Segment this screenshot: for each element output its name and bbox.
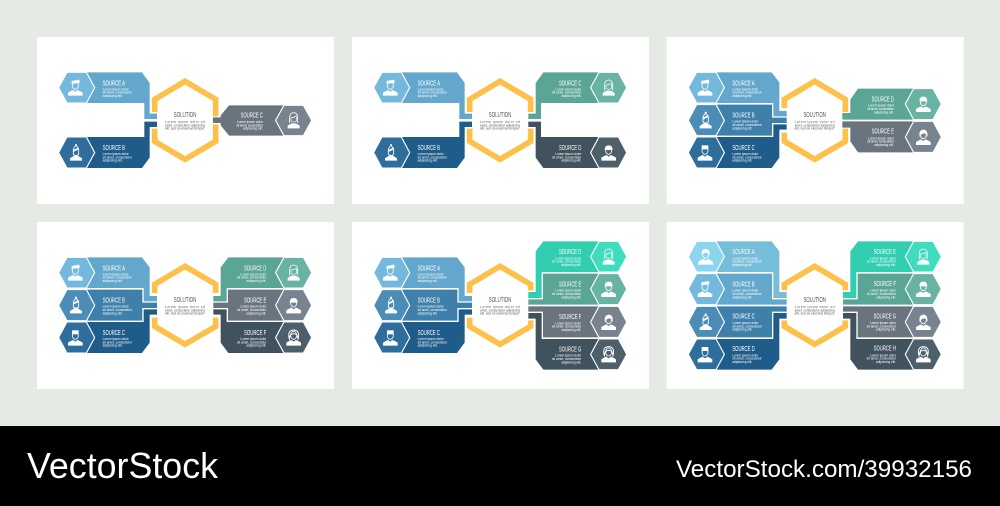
- source C: Lorem ipsum dolor: [237, 120, 263, 124]
- source D: [528, 241, 627, 298]
- source G: Lorem ipsum dolor: [555, 354, 581, 358]
- source F: [843, 274, 941, 305]
- panel 6: eight sources: [667, 222, 964, 389]
- source F: sit amet, consectetur: [237, 340, 266, 344]
- source F: adipiscing elit.: [876, 295, 896, 299]
- source B: sit amet, consectetur: [732, 123, 762, 127]
- source B: [59, 122, 157, 168]
- solution hexagon outline: [155, 81, 216, 159]
- source D: sit amet, consectetur: [237, 276, 266, 280]
- source B: Lorem ipsum dolor: [418, 152, 444, 156]
- panel 5: seven sources: [352, 222, 649, 389]
- source E: adipiscing elit.: [876, 263, 896, 267]
- source A: sit amet, consectetur: [418, 276, 447, 280]
- source D: [213, 257, 312, 301]
- source D: [842, 89, 941, 120]
- source F: [528, 306, 627, 337]
- solution text: elit, sed do eiusmod tempor.: [165, 311, 205, 315]
- solution text: [480, 112, 520, 130]
- source G: Lorem ipsum dolor: [870, 321, 896, 325]
- source D: adipiscing elit.: [561, 263, 581, 267]
- source F: [213, 309, 312, 353]
- source A: SOURCE A: [732, 249, 755, 256]
- solution text: Lorem ipsum dolor sit: [165, 120, 205, 124]
- source A: sit amet, consectetur: [103, 276, 132, 280]
- source C: [688, 124, 787, 168]
- source A: sit amet, consectetur: [103, 91, 132, 95]
- source F: Lorem ipsum dolor: [555, 321, 581, 325]
- source C: sit amet, consectetur: [732, 155, 762, 159]
- solution text: Lorem ipsum dolor sit: [480, 305, 520, 309]
- source A: SOURCE A: [103, 265, 125, 272]
- solution text: [165, 297, 205, 315]
- source B: SOURCE B: [418, 145, 440, 152]
- source B: [59, 290, 157, 321]
- source B: Lorem ipsum dolor: [732, 120, 758, 124]
- source C: adipiscing elit.: [561, 94, 581, 98]
- source C: Lorem ipsum dolor: [555, 87, 581, 91]
- source F: sit amet, consectetur: [552, 325, 581, 329]
- source D: SOURCE D: [244, 265, 266, 272]
- solution hexagon outline: [784, 266, 845, 344]
- panel 2: four sources: [352, 37, 649, 204]
- source E: sit amet, consectetur: [552, 292, 581, 296]
- source G: adipiscing elit.: [561, 360, 581, 364]
- source A: SOURCE A: [418, 265, 440, 272]
- source A: adipiscing elit.: [103, 279, 123, 283]
- brand name: VectorStock: [27, 445, 219, 486]
- solution text: [795, 297, 835, 315]
- source C: [688, 306, 787, 337]
- source C: sit amet, consectetur: [732, 324, 762, 328]
- source B: sit amet, consectetur: [418, 155, 447, 159]
- source C: SOURCE C: [103, 330, 125, 337]
- source C: SOURCE C: [241, 113, 263, 120]
- source D: Lorem ipsum dolor: [732, 353, 758, 357]
- source E: [842, 121, 941, 152]
- source A: [374, 72, 472, 119]
- source D: SOURCE D: [559, 145, 581, 152]
- source B: [374, 290, 472, 321]
- solution text: SOLUTION: [489, 112, 511, 119]
- source B: SOURCE B: [732, 281, 755, 288]
- source C: sit amet, consectetur: [418, 340, 447, 344]
- source C: sit amet, consectetur: [552, 91, 581, 95]
- source A: [688, 241, 787, 298]
- source D: Lorem ipsum dolor: [868, 104, 894, 108]
- source H: adipiscing elit.: [876, 360, 896, 364]
- source C: SOURCE C: [418, 330, 440, 337]
- source B: [374, 122, 472, 168]
- source F: Lorem ipsum dolor: [870, 289, 896, 293]
- source A: [59, 72, 157, 119]
- source A: SOURCE A: [732, 80, 755, 87]
- source A: Lorem ipsum dolor: [732, 87, 758, 91]
- solution text: Lorem ipsum dolor sit: [480, 120, 520, 124]
- source D: [528, 122, 627, 168]
- solution hexagon outline: [470, 266, 531, 344]
- source D: adipiscing elit.: [561, 159, 581, 163]
- source E: adipiscing elit.: [246, 311, 266, 315]
- source D: sit amet, consectetur: [552, 260, 581, 264]
- source D: sit amet, consectetur: [732, 357, 762, 361]
- source G: SOURCE G: [559, 346, 581, 353]
- source C: Lorem ipsum dolor: [418, 337, 444, 341]
- solution text: SOLUTION: [803, 112, 826, 119]
- source C: Lorem ipsum dolor: [103, 337, 129, 341]
- source B: SOURCE B: [732, 113, 755, 120]
- source A: adipiscing elit.: [418, 94, 438, 98]
- source D: Lorem ipsum dolor: [555, 256, 581, 260]
- source A: Lorem ipsum dolor: [103, 272, 129, 276]
- source B: adipiscing elit.: [103, 159, 123, 163]
- solution text: elit, sed do eiusmod tempor.: [165, 126, 205, 130]
- source B: adipiscing elit.: [732, 295, 752, 299]
- source B: sit amet, consectetur: [103, 155, 132, 159]
- source F: Lorem ipsum dolor: [240, 337, 266, 341]
- source D: sit amet, consectetur: [552, 155, 581, 159]
- source F: SOURCE F: [244, 330, 266, 337]
- source C: [374, 309, 472, 353]
- solution text: elit, sed do eiusmod tempor.: [795, 311, 835, 315]
- source A: SOURCE A: [103, 80, 125, 87]
- source A: adipiscing elit.: [732, 94, 752, 98]
- source D: Lorem ipsum dolor: [240, 272, 266, 276]
- source H: SOURCE H: [874, 346, 896, 353]
- source A: SOURCE A: [418, 80, 440, 87]
- source B: sit amet, consectetur: [732, 292, 762, 296]
- source D: SOURCE D: [559, 249, 581, 256]
- source E: SOURCE E: [559, 282, 582, 289]
- solution text: [480, 297, 520, 315]
- source E: Lorem ipsum dolor: [868, 136, 894, 140]
- source E: [843, 241, 941, 298]
- source E: adipiscing elit.: [874, 143, 894, 147]
- source C: [528, 72, 627, 119]
- source F: adipiscing elit.: [561, 328, 581, 332]
- panel 3: five sources: [667, 37, 964, 204]
- source B: adipiscing elit.: [418, 311, 438, 315]
- solution text: [795, 112, 835, 130]
- source C: adipiscing elit.: [243, 127, 263, 131]
- solution text: Lorem ipsum dolor sit: [165, 305, 205, 309]
- source A: Lorem ipsum dolor: [103, 87, 129, 91]
- source B: [688, 105, 787, 136]
- solution text: SOLUTION: [803, 297, 826, 304]
- source C: adipiscing elit.: [103, 344, 123, 348]
- source C: Lorem ipsum dolor: [732, 321, 758, 325]
- source B: sit amet, consectetur: [418, 308, 447, 312]
- source C: SOURCE C: [732, 314, 755, 321]
- source H: Lorem ipsum dolor: [870, 353, 896, 357]
- source A: adipiscing elit.: [103, 94, 123, 98]
- solution hexagon outline: [470, 81, 531, 159]
- source F: adipiscing elit.: [246, 344, 266, 348]
- source A: [688, 72, 787, 116]
- source A: [374, 257, 472, 301]
- source C: adipiscing elit.: [418, 344, 438, 348]
- solution text: amet, consectetur adipiscing: [165, 123, 205, 127]
- source C: [59, 309, 157, 353]
- source F: sit amet, consectetur: [867, 292, 896, 296]
- source E: Lorem ipsum dolor: [870, 256, 896, 260]
- solution text: Lorem ipsum dolor sit: [795, 305, 835, 309]
- source G: adipiscing elit.: [876, 328, 896, 332]
- source H: sit amet, consectetur: [867, 357, 896, 361]
- source G: [843, 306, 941, 337]
- source F: SOURCE F: [874, 281, 896, 288]
- solution text: SOLUTION: [174, 297, 196, 304]
- solution text: elit, sed do eiusmod tempor.: [795, 126, 835, 130]
- solution text: SOLUTION: [174, 112, 196, 119]
- source B: Lorem ipsum dolor: [103, 152, 129, 156]
- source E: SOURCE E: [872, 129, 894, 136]
- source F: SOURCE F: [559, 314, 581, 321]
- source A: sit amet, consectetur: [732, 91, 762, 95]
- solution text: elit, sed do eiusmod tempor.: [480, 311, 520, 315]
- source E: SOURCE E: [874, 249, 896, 256]
- solution text: amet, consectetur adipiscing: [480, 308, 520, 312]
- source A: adipiscing elit.: [418, 279, 438, 283]
- source B: sit amet, consectetur: [103, 308, 132, 312]
- source E: [528, 274, 627, 305]
- source G: sit amet, consectetur: [867, 324, 896, 328]
- source B: Lorem ipsum dolor: [103, 305, 129, 309]
- source C: SOURCE C: [559, 80, 581, 87]
- source B: SOURCE B: [103, 298, 125, 305]
- source E: sit amet, consectetur: [237, 308, 266, 312]
- solution text: amet, consectetur adipiscing: [165, 308, 205, 312]
- source A: sit amet, consectetur: [418, 91, 447, 95]
- source C: sit amet, consectetur: [236, 123, 263, 127]
- source C: SOURCE C: [732, 145, 755, 152]
- source D: adipiscing elit.: [874, 110, 894, 114]
- image id: VectorStock.com/39932156: [676, 456, 972, 483]
- source C: Lorem ipsum dolor: [732, 152, 758, 156]
- source D: Lorem ipsum dolor: [555, 152, 581, 156]
- source A: Lorem ipsum dolor: [418, 272, 444, 276]
- source B: adipiscing elit.: [732, 126, 752, 130]
- source D: sit amet, consectetur: [867, 107, 894, 111]
- solution text: amet, consectetur adipiscing: [795, 308, 835, 312]
- source C: adipiscing elit.: [732, 328, 752, 332]
- source D: adipiscing elit.: [732, 360, 752, 364]
- source E: SOURCE E: [244, 298, 267, 305]
- solution text: amet, consectetur adipiscing: [795, 123, 835, 127]
- solution hexagon outline: [155, 266, 216, 344]
- source E: [213, 290, 312, 321]
- panel 1: three sources: [37, 37, 334, 204]
- source B: Lorem ipsum dolor: [418, 305, 444, 309]
- source E: sit amet, consectetur: [867, 140, 894, 144]
- source B: SOURCE B: [103, 145, 125, 152]
- solution text: elit, sed do eiusmod tempor.: [480, 126, 520, 130]
- source C: sit amet, consectetur: [103, 340, 132, 344]
- source A: sit amet, consectetur: [732, 260, 762, 264]
- source C: adipiscing elit.: [732, 159, 752, 163]
- source E: Lorem ipsum dolor: [240, 305, 266, 309]
- source B: adipiscing elit.: [418, 159, 438, 163]
- panel 4: six sources: [37, 222, 334, 389]
- source G: [528, 313, 627, 370]
- solution text: amet, consectetur adipiscing: [480, 123, 520, 127]
- source B: adipiscing elit.: [103, 311, 123, 315]
- source G: SOURCE G: [874, 314, 896, 321]
- source A: [59, 257, 157, 301]
- source E: Lorem ipsum dolor: [555, 289, 581, 293]
- source A: Lorem ipsum dolor: [418, 87, 444, 91]
- footer bar: [0, 426, 1000, 506]
- solution text: Lorem ipsum dolor sit: [795, 120, 835, 124]
- source E: sit amet, consectetur: [867, 260, 896, 264]
- source A: Lorem ipsum dolor: [732, 256, 758, 260]
- source B: SOURCE B: [418, 298, 440, 305]
- source H: [843, 313, 941, 370]
- source E: adipiscing elit.: [561, 295, 581, 299]
- source D: SOURCE D: [872, 97, 894, 104]
- source D: [688, 313, 787, 370]
- source A: adipiscing elit.: [732, 263, 752, 267]
- source D: adipiscing elit.: [246, 279, 266, 283]
- source G: sit amet, consectetur: [552, 357, 581, 361]
- solution text: [165, 112, 205, 130]
- source B: [688, 274, 787, 305]
- solution hexagon outline: [784, 81, 845, 159]
- source D: SOURCE D: [732, 346, 755, 353]
- solution text: SOLUTION: [489, 297, 511, 304]
- source B: Lorem ipsum dolor: [732, 289, 758, 293]
- source C: [213, 105, 312, 136]
